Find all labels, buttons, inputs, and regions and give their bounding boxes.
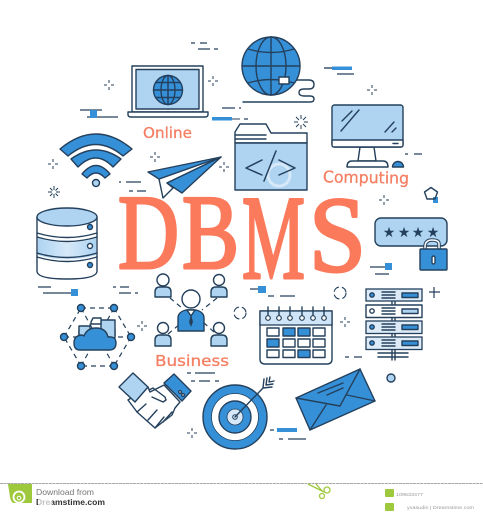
icon: handshake: [119, 373, 191, 428]
icon: paper plane: [148, 157, 221, 198]
icon: cloud network: [60, 304, 134, 370]
icon: laptop with globe: [128, 66, 208, 117]
icon: wifi signal: [60, 134, 132, 186]
footer: image id and credit: yvasudin | Dreamstime.com: [407, 505, 474, 510]
footer: Dreamstime logo: [8, 484, 32, 503]
icon: password box and padlock: ★: [427, 225, 439, 241]
footer: image id and credit: 109633477: [396, 492, 424, 497]
title: DBMS: D: [118, 174, 179, 291]
footer: download text: Dreamstime.com: [36, 497, 105, 507]
label: Business: Business: [155, 352, 229, 370]
icon: password box and padlock: ★: [398, 225, 410, 241]
icon: envelope: [296, 369, 375, 430]
icon: server rack: [366, 289, 422, 360]
icon: desktop monitor: [332, 105, 404, 167]
footer: download text: [36, 487, 105, 507]
decorative sparkles and dashes: [38, 43, 440, 439]
title: DBMS: M: [242, 171, 305, 304]
icon: password box and padlock: ★: [412, 225, 424, 241]
title: DBMS: S: [309, 176, 366, 295]
icon: database cylinder: [37, 208, 97, 279]
icon: code folder: [235, 124, 307, 190]
title: DBMS: [118, 171, 366, 304]
footer: download text: Download from: [36, 487, 94, 497]
label: Online: Online: [143, 124, 192, 142]
footer divider: [0, 482, 483, 484]
icon: large globe with cable: [242, 37, 314, 102]
title: DBMS: B: [182, 174, 239, 291]
icon: target with arrow: [203, 377, 274, 449]
label: Computing: Computing: [323, 167, 409, 188]
footer: image id and credit: [385, 489, 474, 511]
footer: scissors: [308, 484, 330, 498]
icon: password box and padlock: [375, 218, 447, 270]
icon: calendar: [260, 307, 332, 364]
icon: business team: [155, 274, 227, 346]
icon: password box and padlock: ★: [383, 225, 395, 241]
